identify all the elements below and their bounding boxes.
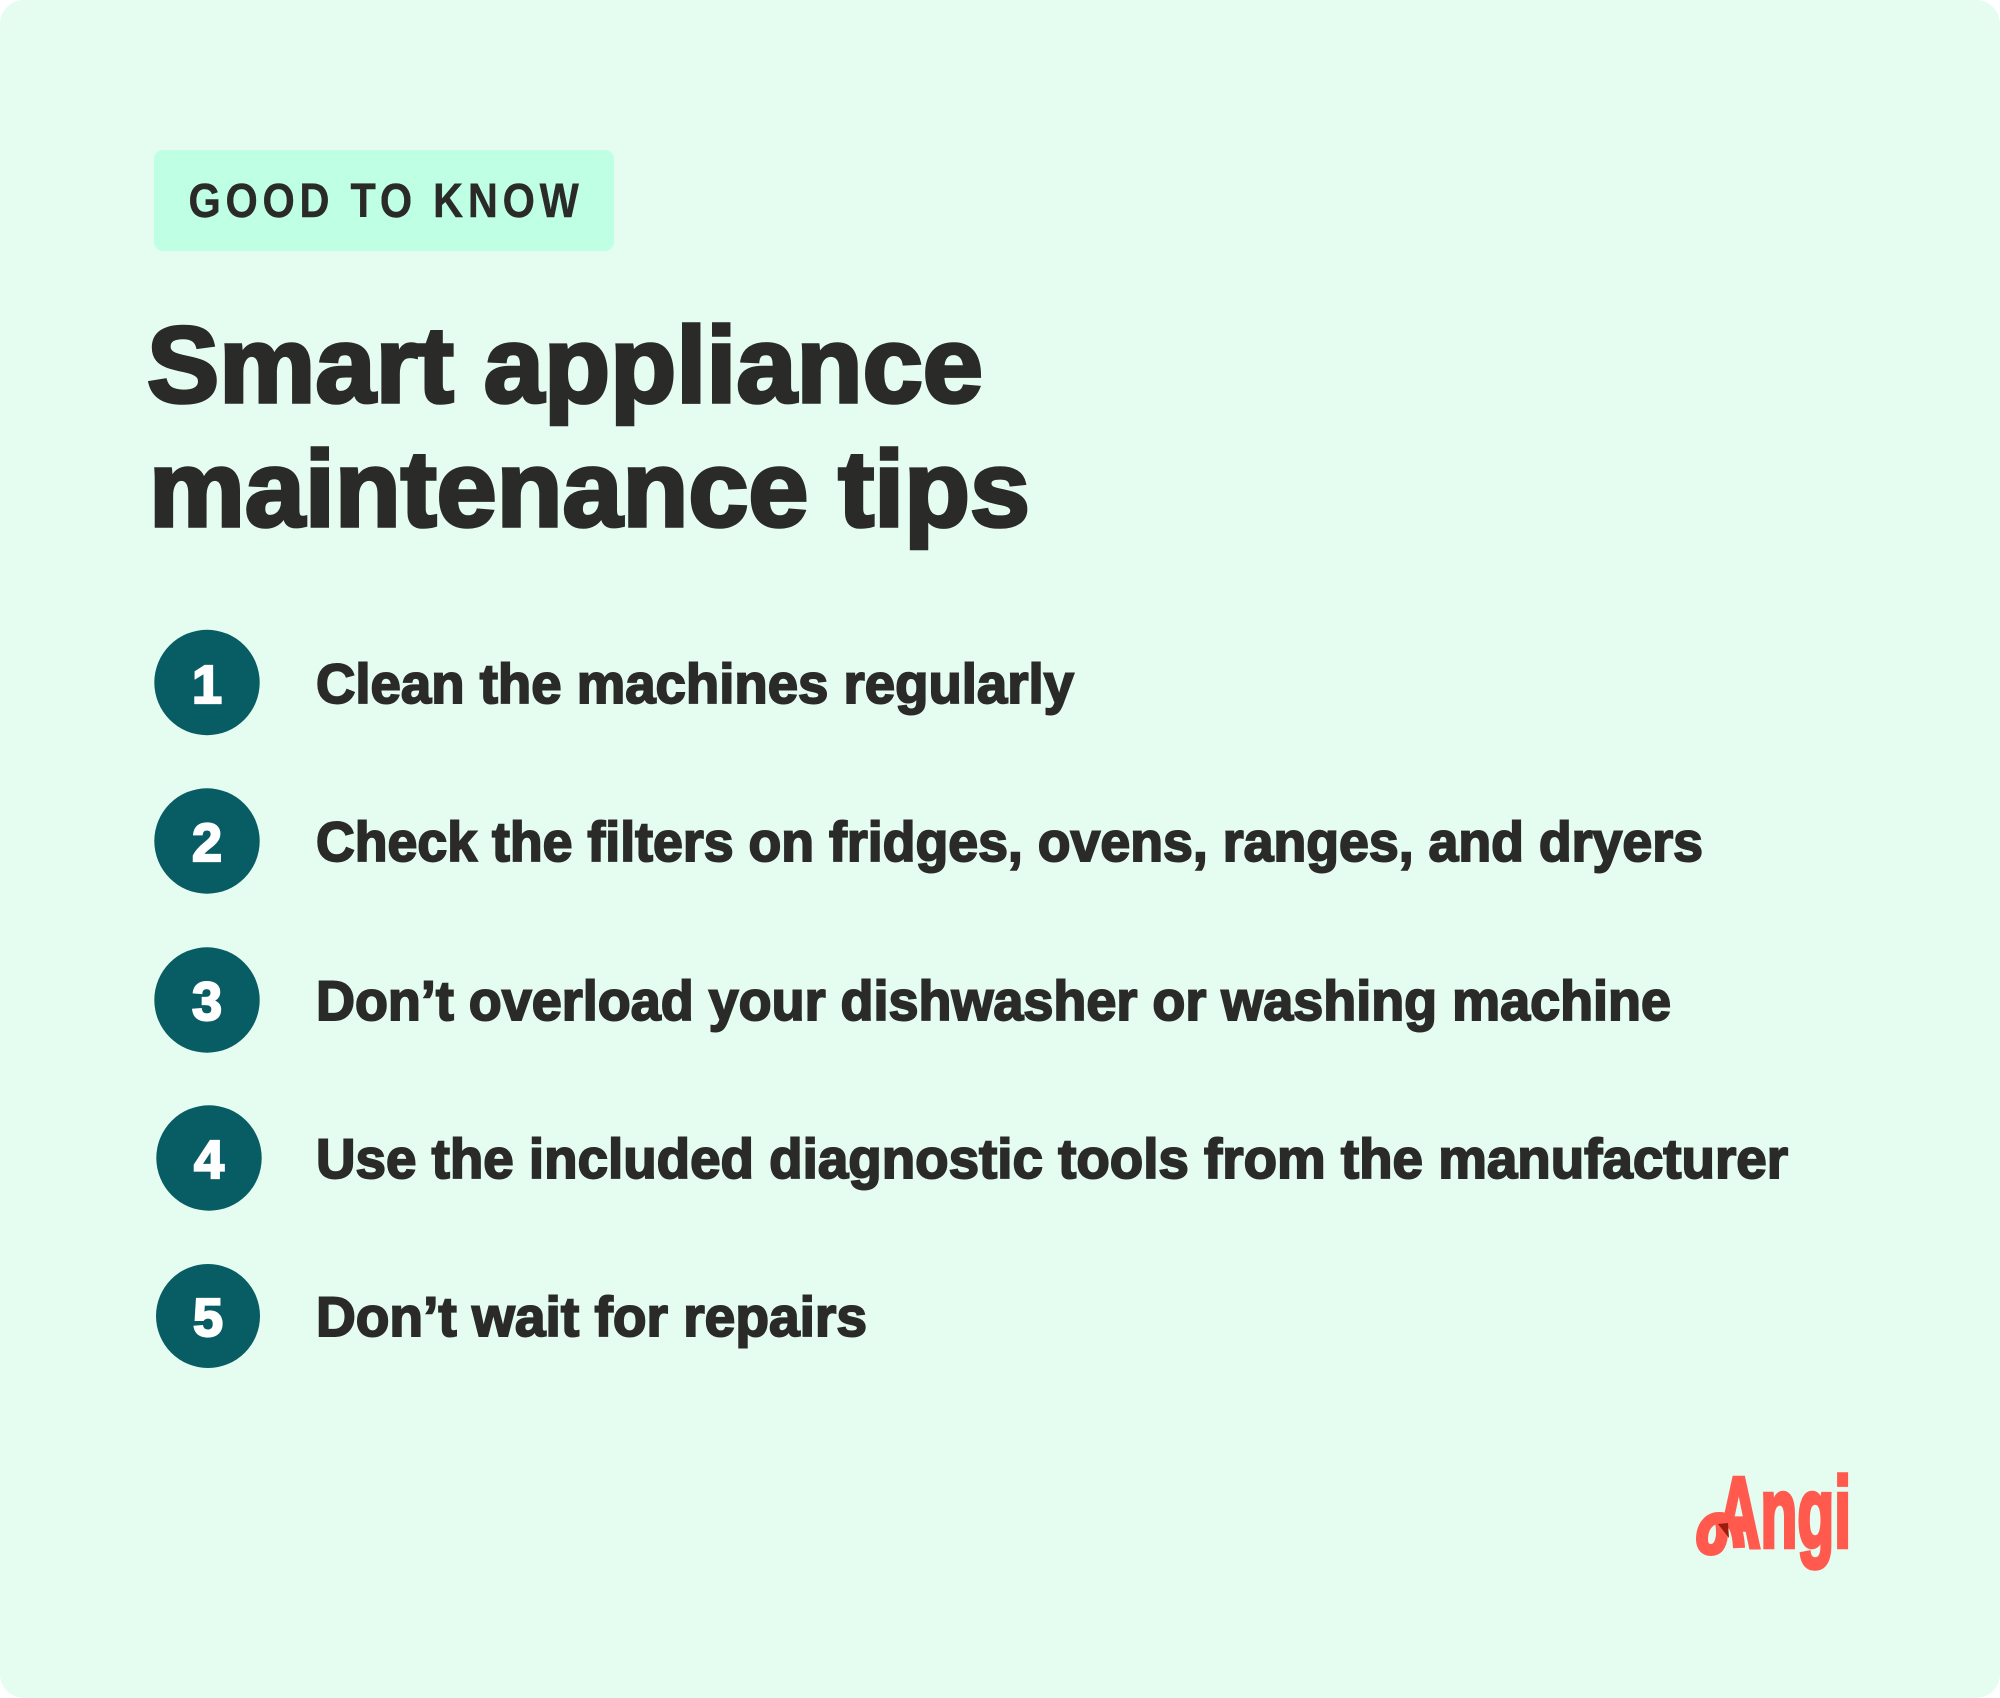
tip 5: 5 — [193, 1288, 223, 1348]
title: maintenance tips — [149, 428, 1030, 549]
tip 4: Use the included diagnostic tools from the manufacturer — [316, 1127, 1788, 1190]
tip 3: 3 — [192, 972, 222, 1032]
tip 1: 1 — [192, 655, 222, 715]
tip 4 — [156, 1105, 1788, 1211]
tip 2: 2 — [192, 813, 222, 873]
tip 2: Check the filters on fridges, ovens, ranges, and dryers — [316, 810, 1703, 873]
tag: good to know — [154, 150, 614, 251]
logo: Angi: Angi — [1717, 1457, 1851, 1569]
tip 1 — [154, 630, 1074, 735]
tip 3: Don’t overload your dishwasher or washing machine — [316, 969, 1671, 1032]
tip 3 — [154, 947, 1671, 1053]
title: Smart appliance — [147, 304, 983, 425]
title — [147, 304, 1030, 549]
tip 1: Clean the machines regularly — [316, 652, 1074, 715]
tip 5 — [156, 1264, 867, 1368]
tip 5: Don’t wait for repairs — [316, 1285, 867, 1348]
tip 4: 4 — [194, 1130, 224, 1190]
tag: good to know: GOOD TO KNOW — [188, 175, 584, 228]
tip 2 — [154, 788, 1703, 894]
logo: Angi — [1702, 1457, 1851, 1569]
